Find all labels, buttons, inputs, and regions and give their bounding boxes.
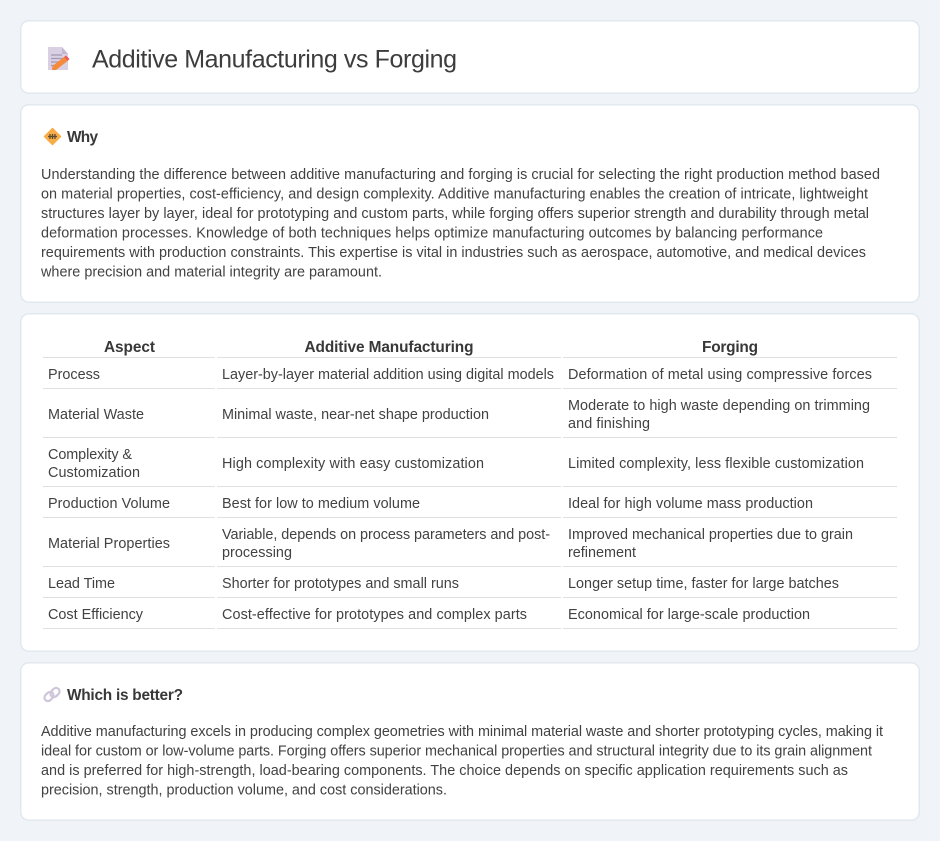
row: material waste: Minimal waste, near-net shape production [222,407,489,423]
text block: which is better paragraph: and is preferred for high-strength, load-bearing components. The choice depends on specific application requirements such as [41,763,848,779]
row: complexity and customization [48,447,864,481]
panel: comparison table [21,314,919,651]
row: production volume: Ideal for high volume mass production [568,496,813,512]
text block: which is better paragraph [41,724,883,798]
row: material waste: Moderate to high waste depending on trimming [568,398,870,414]
row: lead time: Longer setup time, faster for large batches [568,576,839,592]
row: material properties: Variable, depends on process parameters and post- [222,527,550,543]
row: production volume: Best for low to medium volume [222,496,420,512]
text block: why paragraph: where precision and material integrity are paramount. [40,264,382,280]
row: material waste: Material Waste [48,407,144,423]
text block: why paragraph: structures layer by layer, ideal for prototyping and custom parts, while forging offers superior strength and durability through metal [41,206,869,222]
row: lead time: Lead Time [48,576,115,592]
row: cost efficiency: Cost Efficiency [48,607,144,623]
row: lead time [48,576,839,592]
row: complexity and customization: High complexity with easy customization [222,456,484,472]
row: process: Process [48,367,100,383]
icon: warning diamond [44,128,60,144]
row: process [48,367,872,383]
row: process: Layer-by-layer material addition using digital models [222,367,554,383]
text block: which is better paragraph: ideal for custom or low-volume parts. Forging offers superior mechanical properties and structural integrity due to its grain alignment [41,744,872,760]
row: material properties: processing [222,545,292,561]
text block: why paragraph: requirements with production constraints. This expertise is vital in industries such as aerospace, automotive, and medical devices [41,245,866,261]
row: cost efficiency [48,607,810,623]
row: lead time: Shorter for prototypes and small runs [222,576,459,592]
row: production volume: Production Volume [48,496,170,512]
row: cost efficiency: Cost-effective for prototypes and complex parts [222,607,527,623]
text block: why paragraph: Understanding the difference between additive manufacturing and forging is crucial for selecting the right production method based [41,167,880,183]
row: material properties [48,527,853,561]
row: material properties: Material Properties [48,536,170,552]
row: material properties: refinement [568,545,636,561]
row: complexity and customization: Limited complexity, less flexible customization [568,456,864,472]
text block: why paragraph [40,167,880,280]
text block: why paragraph: on material properties, cost-efficiency, and design complexity. Additive manufacturing enables the creation of intricate, lightweight [41,186,868,202]
text block: why paragraph: deformation processes. Knowledge of both techniques helps optimize manufacturing outcomes by balancing performance [41,226,823,242]
heading: why: Why [67,129,98,146]
icon: link [43,686,61,703]
row: material waste: and finishing [568,416,650,432]
row: complexity and customization: Customization [48,465,140,481]
panel: which is better [21,663,919,820]
table header row: Forging [702,339,758,356]
table header row: Aspect [104,339,155,356]
title: Additive Manufacturing vs Forging [92,46,457,74]
row: material properties: Improved mechanical properties due to grain [568,527,853,543]
panel: why [21,105,919,302]
icon: document with pencil [48,47,70,70]
row: material waste [48,398,870,432]
row: cost efficiency: Economical for large-scale production [568,607,810,623]
row: complexity and customization: Complexity & [48,447,132,463]
table header row [104,339,758,356]
row: process: Deformation of metal using compressive forces [568,367,872,383]
heading: which is better: Which is better? [67,687,183,704]
text block: which is better paragraph: precision, strength, production volume, and cost considerations. [41,782,447,798]
row: production volume [48,496,813,512]
table header row: Additive Manufacturing [304,339,474,356]
panel: title header [21,21,919,93]
text block: which is better paragraph: Additive manufacturing excels in producing complex geometries with minimal material waste and shorter prototyping cycles, making it [41,724,883,740]
